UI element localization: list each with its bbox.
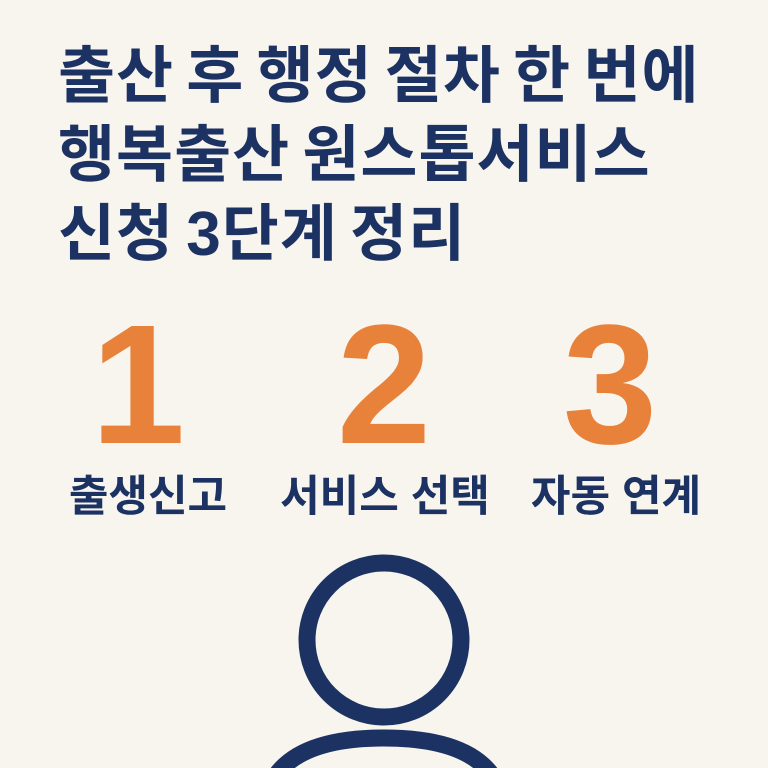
title [58, 42, 700, 269]
title: 출산 후 행정 절차 한 번에 [58, 42, 700, 111]
step 2 number: 2 [337, 290, 431, 480]
step 3 label: 자동 연계 [531, 473, 701, 521]
step 1 number: 1 [91, 290, 185, 480]
title: 신청 3단계 정리 [58, 200, 466, 269]
step 3 number: 3 [563, 290, 657, 480]
step 2 label: 서비스 선택 [280, 473, 490, 521]
step 1 label: 출생신고 [69, 473, 227, 521]
title: 행복출산 원스톱서비스 [58, 121, 651, 190]
